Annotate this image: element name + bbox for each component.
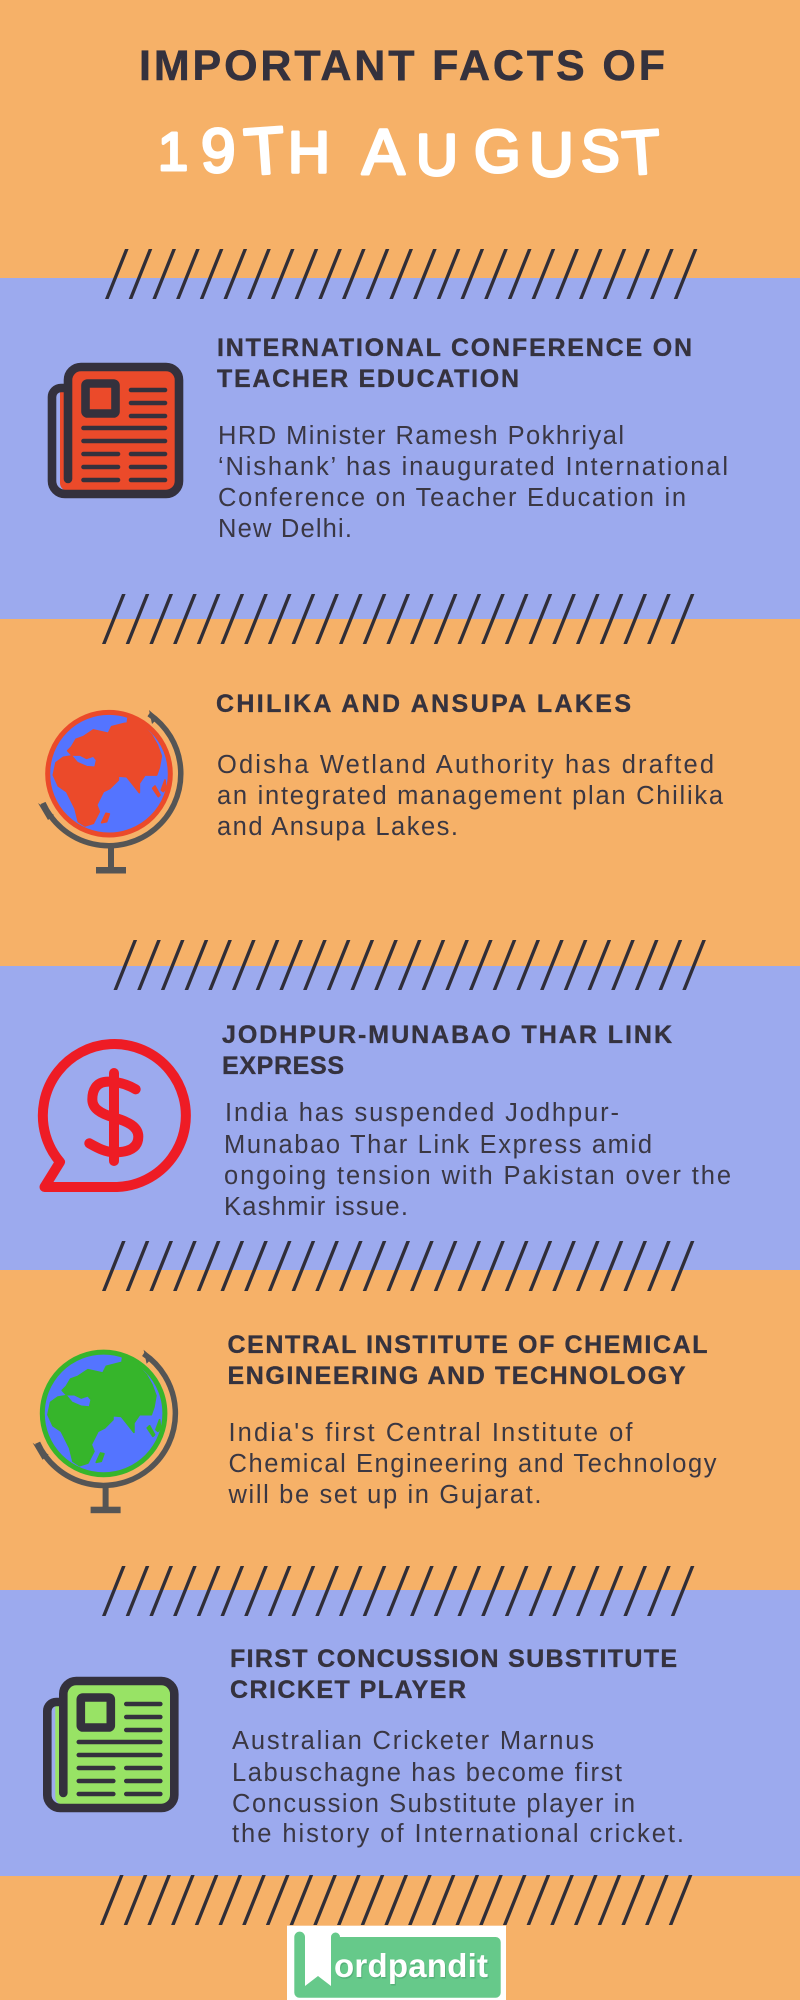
body text: fact 5: the history of International cricket. bbox=[232, 1820, 684, 1848]
hatch divider 6 bbox=[110, 1875, 682, 1925]
title date: 19th august: 9 bbox=[201, 117, 235, 186]
icon: red newspaper bbox=[52, 367, 179, 494]
hatch divider 2 bbox=[112, 594, 684, 644]
panel: fact 1 international conference bbox=[52, 334, 728, 543]
panel: fact 5 concussion substitute bbox=[47, 1645, 684, 1848]
hatch divider 4 bbox=[112, 1241, 684, 1291]
heading: fact 3: EXPRESS bbox=[222, 1052, 344, 1080]
heading: fact 5: CRICKET PLAYER bbox=[230, 1676, 466, 1704]
logo: wordpandit bbox=[287, 1926, 506, 2000]
heading: fact 4: CENTRAL INSTITUTE OF CHEMICAL bbox=[228, 1331, 708, 1359]
heading: fact 1: TEACHER EDUCATION bbox=[217, 365, 519, 393]
body text: fact 5: Concussion Substitute player in bbox=[232, 1790, 635, 1818]
logo: wordpandit: ordpandit bbox=[334, 1947, 488, 1984]
body text: fact 3: India has suspended Jodhpur- bbox=[225, 1099, 619, 1127]
heading: fact 4: ENGINEERING AND TECHNOLOGY bbox=[228, 1362, 686, 1390]
body text: fact 2: and Ansupa Lakes. bbox=[217, 813, 458, 841]
title date: 19th august: A bbox=[362, 116, 405, 188]
title date: 19th august: U bbox=[529, 121, 574, 190]
title date: 19th august: U bbox=[416, 123, 458, 188]
title date: 19th august: S bbox=[581, 119, 620, 184]
icon: red globe bbox=[38, 710, 181, 874]
body text: fact 1: ‘Nishank’ has inaugurated International bbox=[218, 453, 728, 481]
panel: fact 2 chilika lakes bbox=[38, 690, 724, 874]
body text: fact 3: Munabao Thar Link Express amid bbox=[224, 1131, 652, 1159]
hatch divider 1 bbox=[115, 249, 687, 299]
icon: dollar speech bubble bbox=[43, 1044, 186, 1187]
panel: blue band 1 bbox=[0, 278, 800, 619]
body text: fact 3: ongoing tension with Pakistan over the bbox=[224, 1162, 731, 1190]
title date: 19th august: G bbox=[474, 118, 521, 185]
body text: fact 4: India's first Central Institute of bbox=[228, 1419, 633, 1447]
body text: fact 4: will be set up in Gujarat. bbox=[228, 1481, 542, 1509]
body text: fact 1: Conference on Teacher Education in bbox=[218, 484, 686, 512]
heading: fact 1: INTERNATIONAL CONFERENCE ON bbox=[217, 334, 692, 362]
heading: fact 3: JODHPUR-MUNABAO THAR LINK bbox=[222, 1021, 672, 1049]
hatch divider 5 bbox=[112, 1566, 684, 1616]
hatch divider 3 bbox=[123, 940, 696, 990]
panel: blue band 3 bbox=[0, 1590, 800, 1876]
body text: fact 2: Odisha Wetland Authority has drafted bbox=[217, 751, 714, 779]
panel: fact 4 chemical institute bbox=[33, 1331, 717, 1513]
logo: wordpandit: ordpandit bbox=[335, 1948, 489, 1986]
body text: fact 1: HRD Minister Ramesh Pokhriyal bbox=[218, 422, 624, 450]
body text: fact 4: Chemical Engineering and Technology bbox=[228, 1450, 717, 1478]
body text: fact 5: Labuschagne has become first bbox=[232, 1759, 622, 1787]
panel: fact 3 thar link express bbox=[43, 1021, 731, 1221]
title line: important facts of: IMPORTANT FACTS OF bbox=[139, 42, 665, 90]
body text: fact 1: New Delhi. bbox=[218, 515, 352, 543]
body text: fact 2: an integrated management plan Chilika bbox=[217, 782, 724, 810]
icon: green globe bbox=[33, 1350, 175, 1513]
icon: green newspaper bbox=[47, 1681, 174, 1808]
body text: fact 3: Kashmir issue. bbox=[224, 1193, 408, 1221]
title date: 19th august: 1 bbox=[158, 122, 188, 182]
panel: blue band 2 bbox=[0, 966, 800, 1270]
title date: 19th august: T bbox=[620, 117, 663, 189]
heading: fact 2: CHILIKA AND ANSUPA LAKES bbox=[216, 690, 631, 718]
body text: fact 5: Australian Cricketer Marnus bbox=[232, 1727, 594, 1755]
title date: 19th august: T bbox=[242, 112, 287, 189]
heading: fact 5: FIRST CONCUSSION SUBSTITUTE bbox=[230, 1645, 677, 1673]
title date: 19th august: H bbox=[288, 120, 330, 185]
